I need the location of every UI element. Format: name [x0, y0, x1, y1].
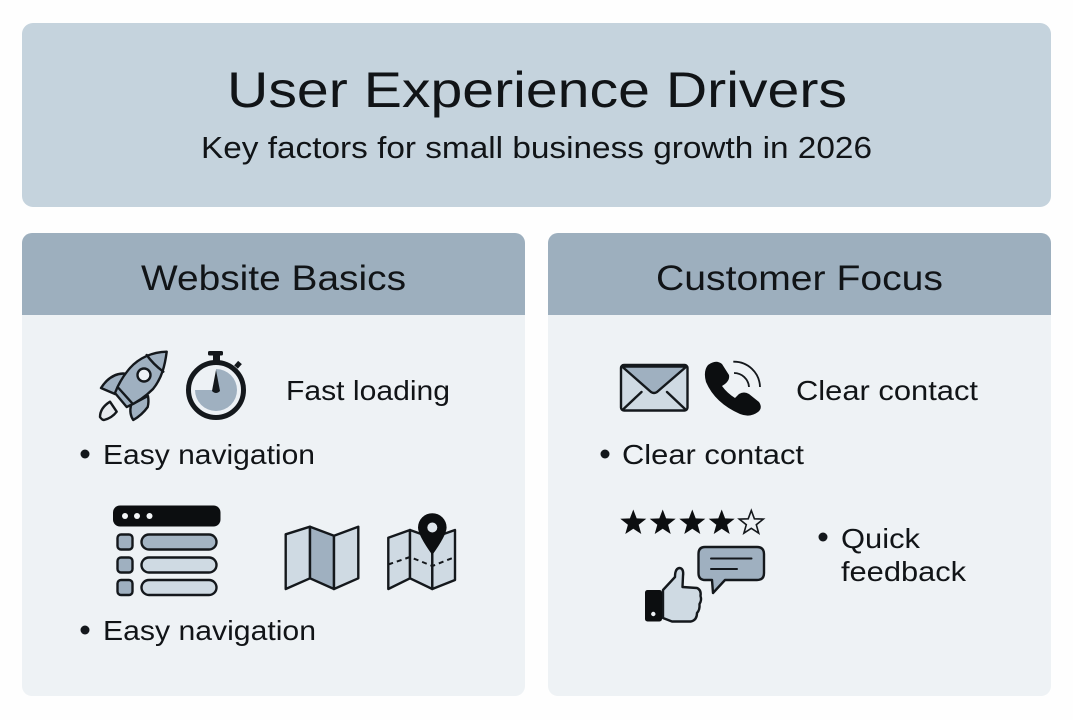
icon: rocket — [100, 352, 167, 420]
label: fast loading: Fast loading — [286, 375, 450, 406]
icon: star rating — [620, 510, 763, 534]
label: clear contact: Clear contact — [796, 375, 978, 406]
bullet: clear contact: Clear contact — [622, 439, 804, 470]
panel header: website basics: Website Basics — [141, 259, 406, 298]
icon: telephone — [705, 362, 761, 416]
icon: speech bubble — [698, 547, 764, 593]
bullet: easy navigation: Easy navigation — [103, 615, 316, 646]
bullet: quick feedback — [818, 523, 967, 587]
subtitle: Key factors for small business growth in 2026 — [201, 130, 872, 165]
icon: thumbs up — [645, 568, 701, 622]
icon: envelope — [621, 365, 688, 410]
bullet: quick feedback: Quick — [841, 523, 921, 554]
icon: website layout — [113, 506, 220, 595]
panel: customer focus — [548, 233, 1051, 696]
panel header: customer focus: Customer Focus — [656, 259, 943, 298]
panel header: customer focus — [548, 233, 1051, 315]
panel: website basics — [22, 233, 525, 696]
title: User Experience Drivers — [227, 62, 847, 118]
icon: stopwatch — [188, 351, 244, 418]
icon: map with location pin — [388, 513, 455, 589]
panel: title banner — [22, 23, 1051, 207]
icon: folded map — [286, 527, 358, 589]
bullet: quick feedback: feedback — [841, 556, 967, 587]
bullet: easy navigation: Easy navigation — [103, 439, 315, 470]
panel header: website basics — [22, 233, 525, 315]
